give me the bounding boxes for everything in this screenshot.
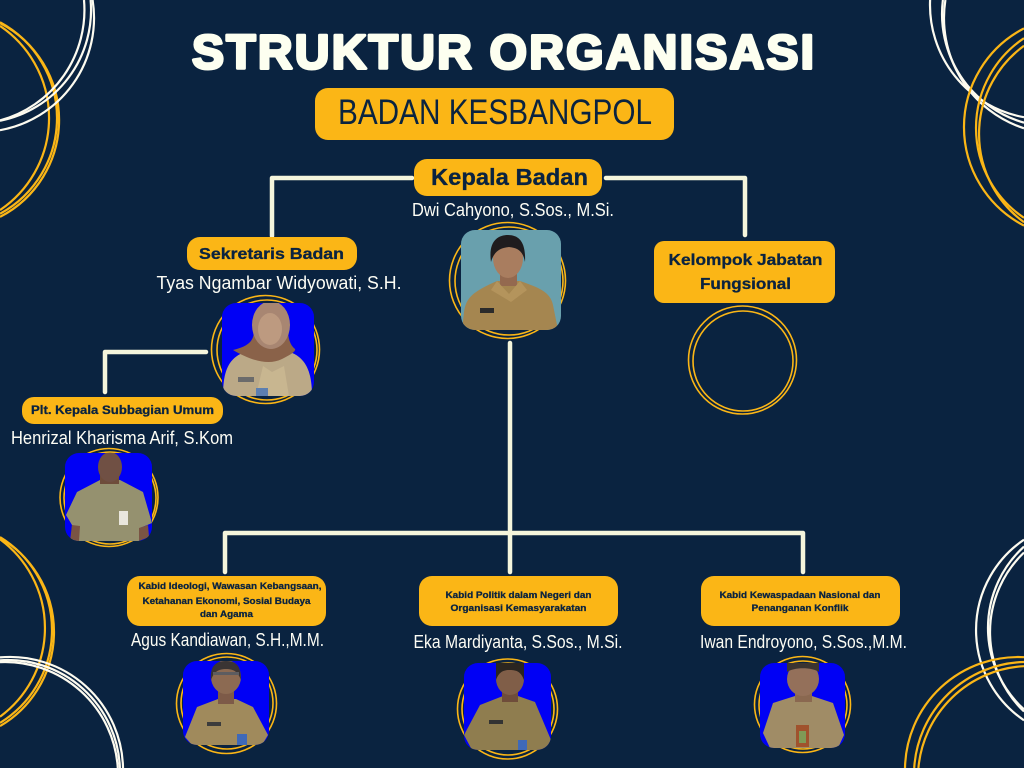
node: Kelompok Jabatan Fungsional: Fungsional: [700, 276, 791, 293]
node: Kelompok Jabatan Fungsional: [654, 241, 835, 414]
node: Kabid Kewaspadaan: [700, 576, 907, 752]
node: Sekretaris Badan: [156, 237, 402, 404]
decorative rings: bottom left: [0, 537, 123, 768]
node: Kabid Ideologi: dan Agama: [200, 609, 254, 620]
node: Kabid Kewaspadaan: Iwan Endroyono, S.Sos.,M.M.: [700, 632, 907, 652]
node: Kepala Badan: [412, 159, 614, 338]
subtitle badge: BADAN KESBANGPOL: [338, 93, 652, 132]
title: STRUKTUR ORGANISASI: [192, 26, 814, 80]
node: Plt. Kepala Subbagian Umum: [11, 397, 233, 546]
connector lines: [105, 178, 803, 572]
node: Kabid Ideologi: Kabid Ideologi, Wawasan Kebangsaan,: [138, 581, 322, 592]
node: Kabid Kewaspadaan: Kabid Kewaspadaan Nasional dan: [720, 590, 881, 601]
node: Sekretaris Badan: Tyas Ngambar Widyowati, S.H.: [156, 273, 402, 293]
decorative rings: top left: [0, 0, 94, 217]
node: Plt. Kepala Subbagian Umum: Plt. Kepala Subbagian Umum: [31, 403, 214, 417]
node: Kepala Badan: Dwi Cahyono, S.Sos., M.Si.: [412, 200, 614, 220]
decorative rings: bottom right: [905, 540, 1024, 768]
node: Kabid Politik: Eka Mardiyanta, S.Sos., M.Si.: [414, 632, 622, 652]
node: Kabid Politik: [414, 576, 622, 759]
node: Kelompok Jabatan Fungsional: Kelompok Jabatan: [668, 252, 822, 269]
node: Sekretaris Badan: Sekretaris Badan: [199, 246, 344, 263]
node: Kabid Ideologi: Ketahanan Ekonomi, Sosial Budaya: [142, 596, 311, 607]
node: Kabid Ideologi: Agus Kandiawan, S.H.,M.M.: [131, 630, 324, 650]
node: Kabid Politik: Kabid Politik dalam Negeri dan: [446, 590, 592, 601]
node: Kabid Ideologi: [127, 576, 326, 754]
node: Kepala Badan: Kepala Badan: [431, 164, 588, 190]
node: Kabid Kewaspadaan: Penanganan Konflik: [752, 603, 849, 614]
node: Plt. Kepala Subbagian Umum: Henrizal Kharisma Arif, S.Kom: [11, 428, 233, 448]
subtitle badge: [315, 88, 674, 140]
node: Kabid Politik: Organisasi Kemasyarakatan: [450, 603, 587, 614]
decorative rings: top right: [930, 0, 1024, 226]
